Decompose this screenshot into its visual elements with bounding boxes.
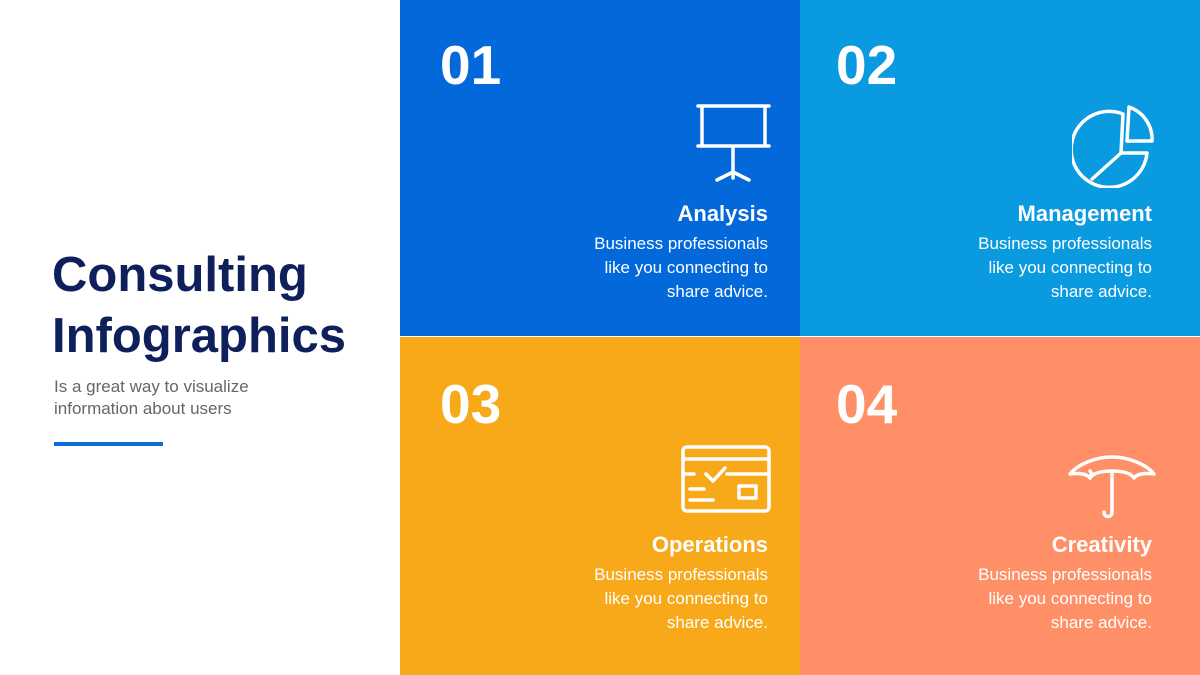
panel: analysis xyxy=(400,0,800,336)
icon: pie chart xyxy=(1072,105,1154,188)
subtitle: information about users xyxy=(54,399,232,418)
panel: operations xyxy=(400,337,800,675)
icon: umbrella xyxy=(1068,455,1156,518)
icon: presentation board xyxy=(696,104,771,182)
text: Business professionals xyxy=(978,565,1152,584)
heading: Analysis xyxy=(678,201,768,226)
text xyxy=(978,234,1152,301)
accent line xyxy=(54,442,163,446)
heading: Management xyxy=(1018,201,1152,226)
subtitle: Is a great way to visualize xyxy=(54,377,249,396)
text: share advice. xyxy=(1051,282,1152,301)
number 03: 03 xyxy=(440,373,501,435)
panel: management xyxy=(800,0,1200,336)
text: share advice. xyxy=(1051,613,1152,632)
text: Business professionals xyxy=(594,234,768,253)
title: Infographics xyxy=(52,309,346,363)
text xyxy=(594,565,768,632)
number 02: 02 xyxy=(836,34,897,96)
text: share advice. xyxy=(667,282,768,301)
text: Business professionals xyxy=(978,234,1152,253)
text: share advice. xyxy=(667,613,768,632)
number 04: 04 xyxy=(836,373,897,435)
text: Business professionals xyxy=(594,565,768,584)
subtitle xyxy=(54,377,249,418)
icon: dashboard card xyxy=(681,445,771,513)
text: like you connecting to xyxy=(604,589,768,608)
title xyxy=(52,248,346,363)
text xyxy=(594,234,768,301)
text: like you connecting to xyxy=(988,589,1152,608)
text: like you connecting to xyxy=(604,258,768,277)
text xyxy=(978,565,1152,632)
number 01: 01 xyxy=(440,34,501,96)
title: Consulting xyxy=(52,248,308,302)
text: like you connecting to xyxy=(988,258,1152,277)
heading: Creativity xyxy=(1052,532,1152,557)
heading: Operations xyxy=(652,532,768,557)
panel: creativity xyxy=(800,337,1200,675)
